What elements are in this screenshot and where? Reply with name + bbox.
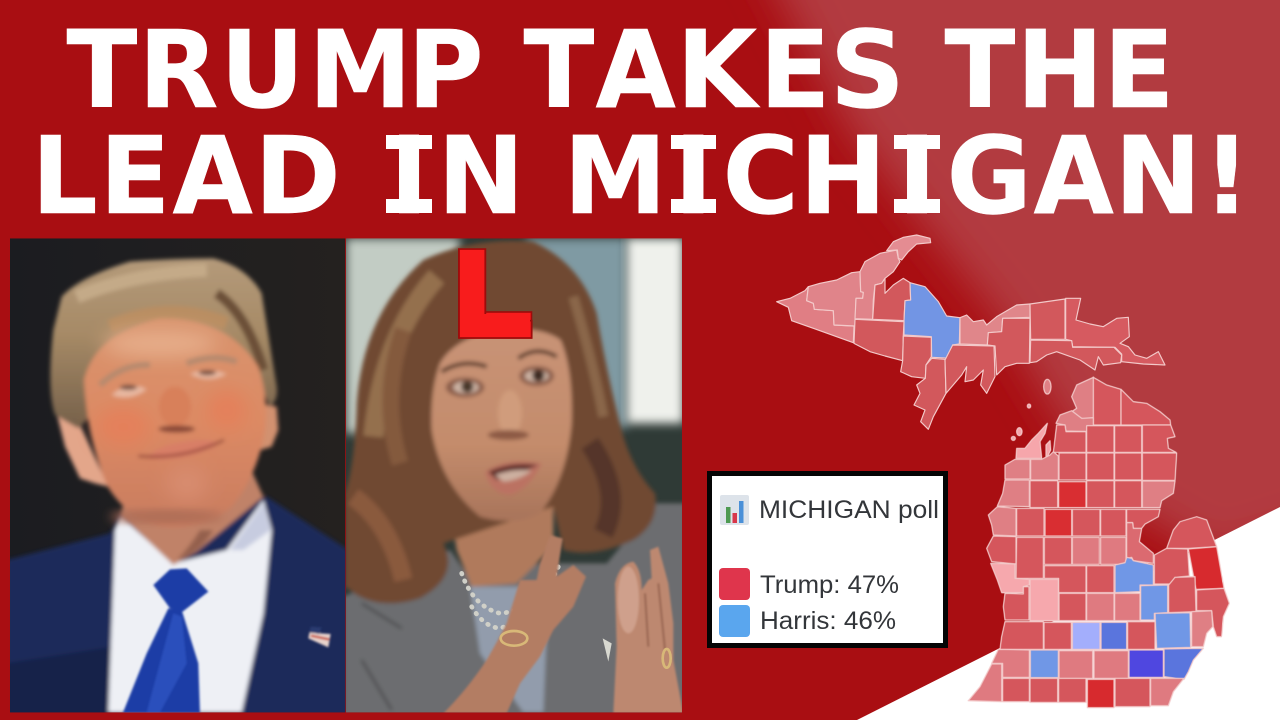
- icon: flag pin: [308, 627, 331, 647]
- poll heading: MICHIGAN poll: [759, 496, 939, 524]
- necktie: [123, 568, 208, 713]
- poll box: [710, 474, 946, 646]
- photo: Kamala Harris: [343, 238, 685, 717]
- lapel pin: [603, 638, 612, 662]
- icon: bar chart: [720, 495, 749, 525]
- eyebrows: [100, 365, 150, 385]
- county: Washtenaw: [1129, 650, 1163, 677]
- legend swatch: Trump: [719, 568, 750, 600]
- mouth: [485, 461, 542, 495]
- neck: [452, 497, 553, 587]
- title line 1: TRUMP TAKES THE: [67, 8, 1174, 132]
- rings: [501, 631, 671, 668]
- county: Sanilac: [1188, 547, 1224, 589]
- neck: [118, 472, 268, 566]
- map: Michigan counties: [777, 235, 1229, 708]
- face: [431, 329, 572, 521]
- county: Genesee: [1141, 585, 1168, 620]
- mouth: [164, 443, 209, 454]
- eyes: [446, 377, 484, 397]
- county: Wayne: [1164, 648, 1203, 679]
- shirt: [108, 500, 272, 712]
- legend: Trump 47%: Trump: 47%: [760, 571, 899, 599]
- photo backdrop: [346, 238, 683, 712]
- skin shading: [97, 330, 247, 500]
- legend: Harris 46%: Harris: 46%: [760, 607, 896, 635]
- right ear: [255, 403, 278, 452]
- inner top: [470, 587, 547, 712]
- eyebrows: [442, 363, 487, 372]
- map: Upper Peninsula: [777, 235, 1165, 429]
- title: [32, 8, 1250, 238]
- suit jacket: [7, 497, 348, 717]
- hair: [345, 241, 656, 603]
- icon: red L: L: [446, 226, 535, 368]
- photo: Donald Trump: [7, 238, 348, 717]
- face: [84, 318, 266, 528]
- eyes: [112, 386, 147, 397]
- county: Ingham: [1072, 622, 1100, 649]
- county: Saginaw: [1115, 557, 1153, 593]
- jacket: [343, 503, 685, 717]
- hair: [50, 258, 277, 428]
- county: Kalamazoo: [1030, 650, 1058, 678]
- legend swatch: Harris: [719, 605, 750, 637]
- county: Marquette: [904, 283, 960, 358]
- left hand: [443, 535, 586, 713]
- nose: [498, 391, 522, 431]
- necklace: [462, 567, 558, 628]
- map: Lower Peninsula: [968, 377, 1229, 708]
- county: Oakland: [1155, 613, 1191, 648]
- left ear: [57, 413, 108, 487]
- nose: [160, 388, 190, 425]
- right hand: [613, 547, 683, 713]
- title line 2: LEAD IN MICHIGAN!: [32, 114, 1250, 238]
